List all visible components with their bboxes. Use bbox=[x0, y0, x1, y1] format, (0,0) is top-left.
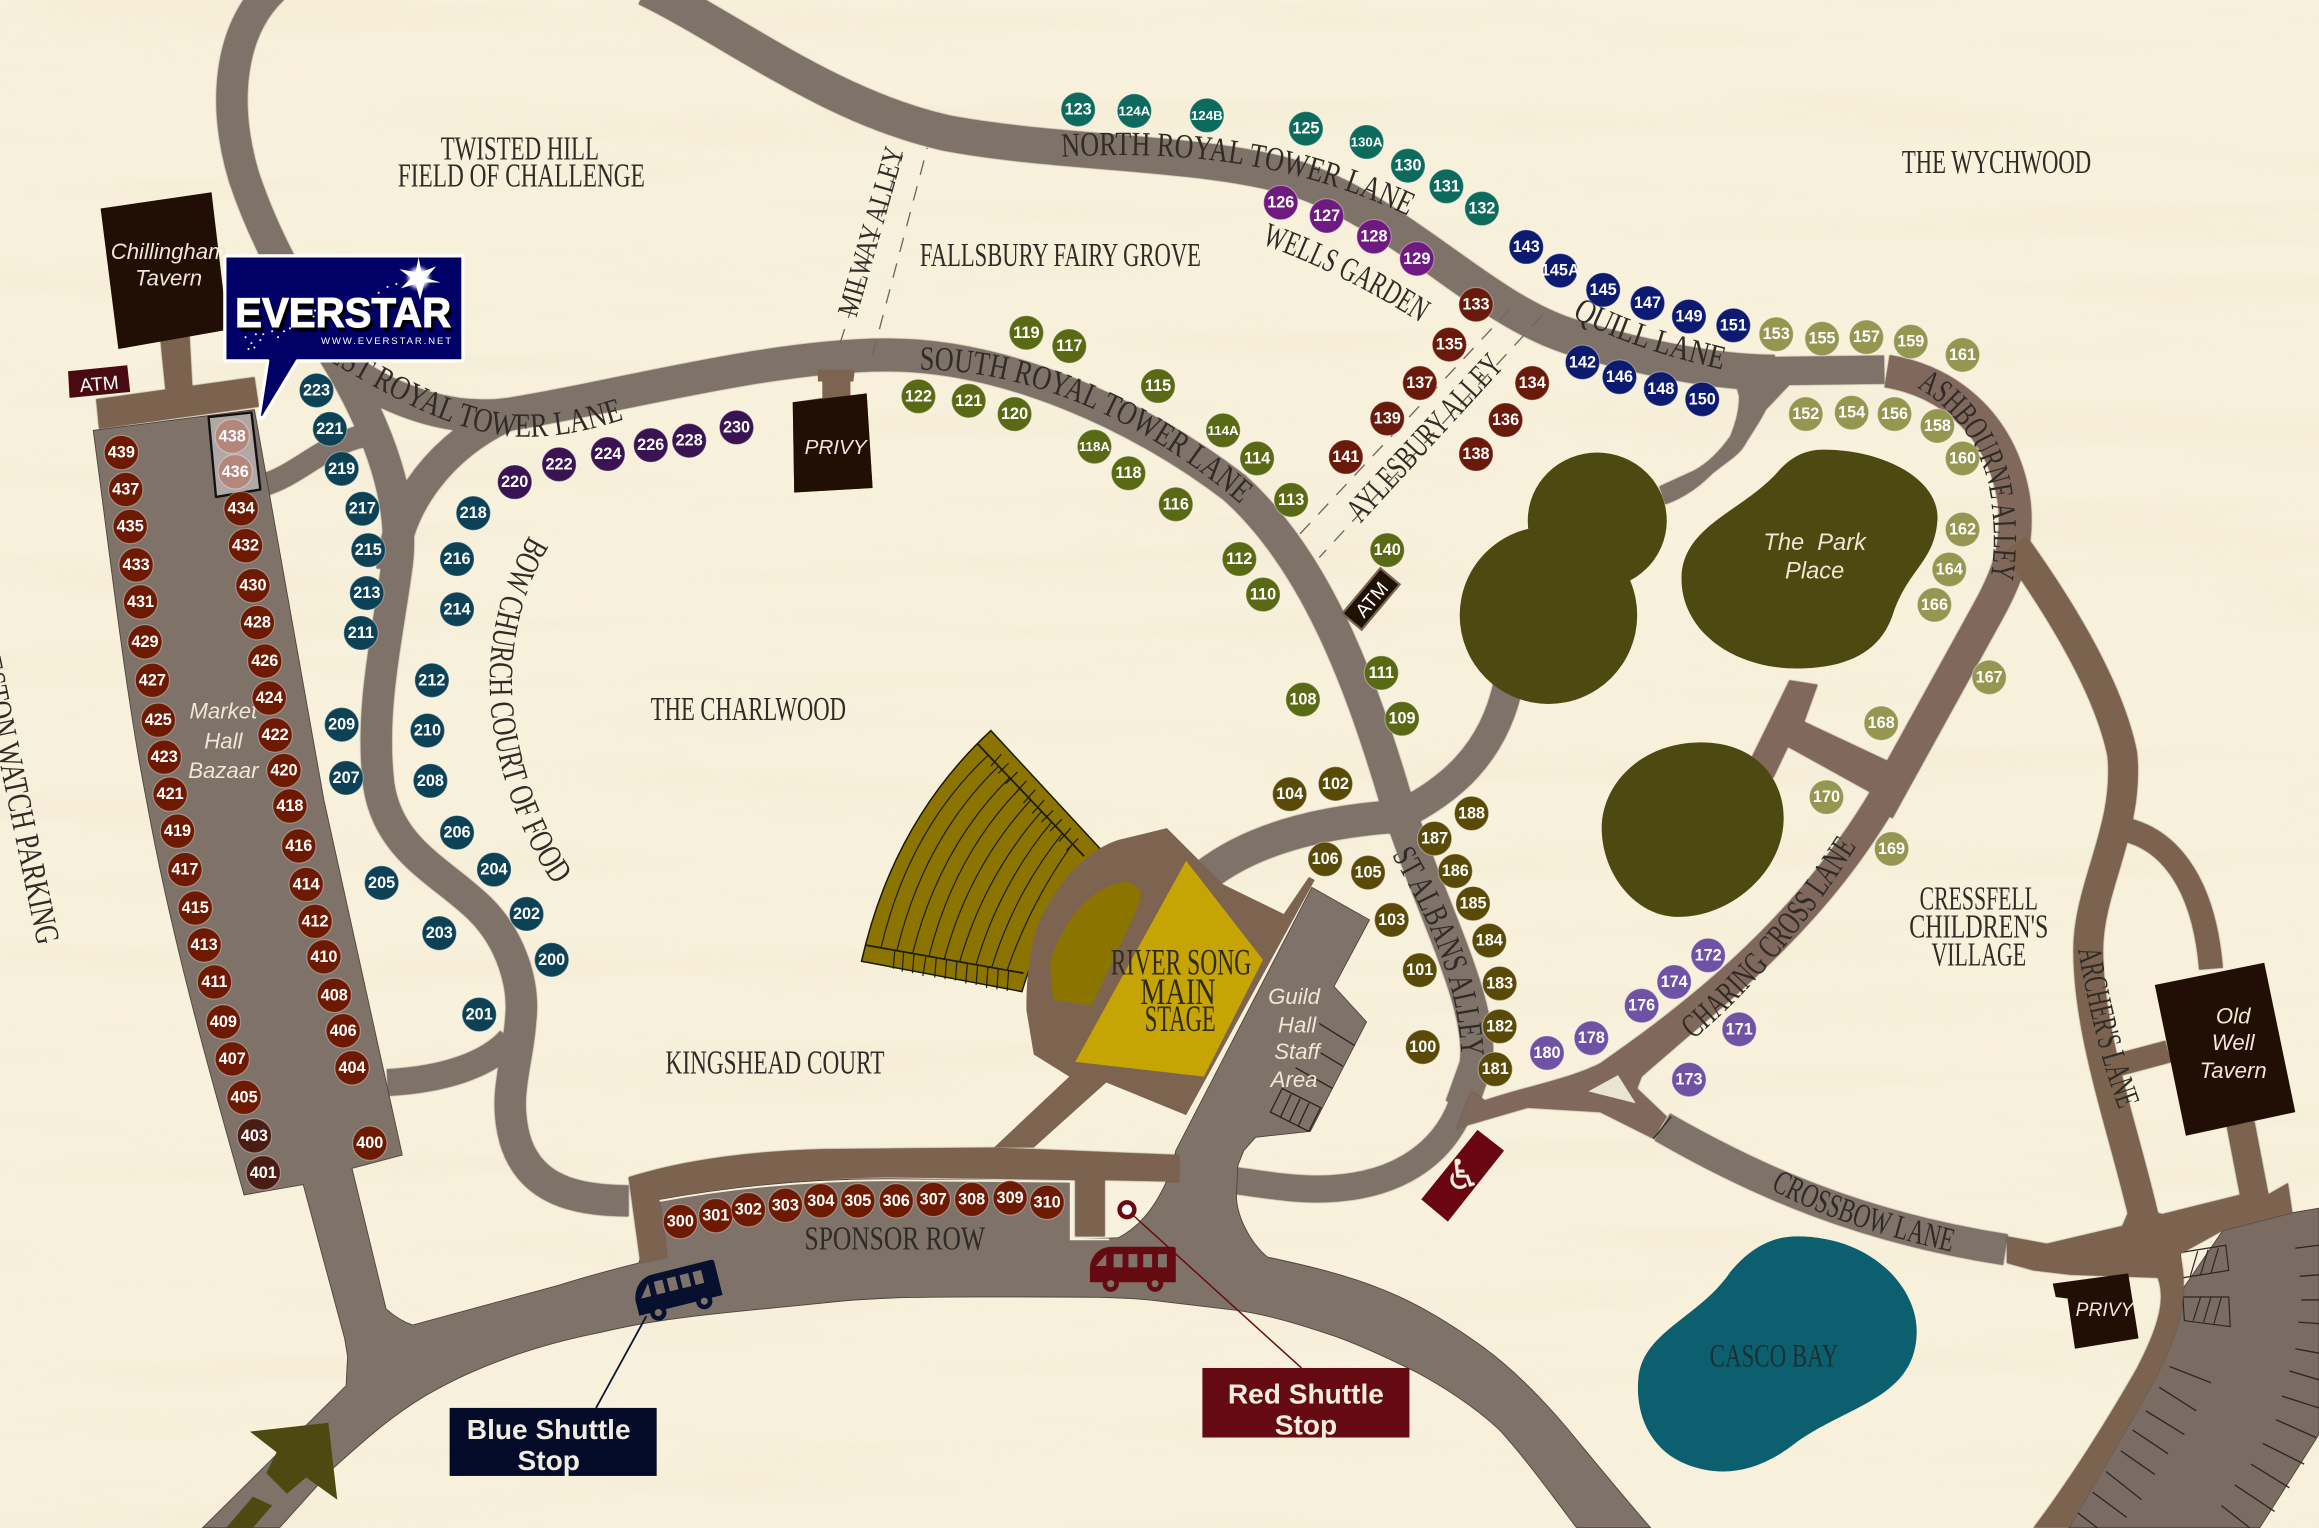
booths: sponsor row 300s: 306 bbox=[883, 1192, 910, 1210]
booths: west royal tower lane purple: 222 bbox=[546, 455, 573, 473]
booths: charing cross lane lavender: 171 bbox=[1726, 1020, 1753, 1038]
booths: market hall bazaar 400s: 419 bbox=[164, 822, 191, 840]
parking lot bbox=[2069, 1208, 2319, 1528]
booths: sponsor row 300s: 302 bbox=[735, 1201, 762, 1219]
booths: south royal tower lane green: 118A bbox=[1079, 439, 1110, 454]
icon: red bus bbox=[1090, 1247, 1176, 1292]
privy north: PRIVY bbox=[805, 436, 869, 459]
callout: red shuttle stop: Red Shuttle bbox=[1228, 1378, 1384, 1409]
booths: ashbourne alley tan: 155 bbox=[1808, 330, 1836, 348]
star dust bbox=[245, 283, 397, 350]
booths: charing cross lane lavender: 176 bbox=[1628, 997, 1655, 1015]
callout: blue shuttle stop: Blue Shuttle bbox=[467, 1414, 631, 1445]
main stage ground bbox=[994, 828, 1315, 1148]
path: chillingham tavern forecourt bbox=[96, 333, 259, 429]
booths: market hall bazaar 400s: 417 bbox=[171, 861, 198, 879]
guild hall staff area parking marks and label bbox=[1268, 984, 1355, 1131]
road: west and south royal tower lane bbox=[343, 355, 1477, 1106]
area labels: THE CHARLWOOD bbox=[651, 691, 846, 728]
booths: aylesbury alley dark red: 139 bbox=[1374, 410, 1401, 428]
market hall bazaar label bbox=[188, 699, 260, 783]
old well tavern: Old bbox=[2216, 1003, 2251, 1028]
booths: bow church court 200s: 209 bbox=[328, 716, 355, 734]
booths: market hall bazaar 400s: 437 bbox=[112, 481, 139, 499]
booths: st albans alley: 100 bbox=[1409, 1038, 1436, 1056]
street labels: CHARING CROSS LANE bbox=[1682, 836, 1856, 1036]
atm east: ATM bbox=[1352, 578, 1393, 622]
market hall bazaar label: Bazaar bbox=[188, 758, 260, 783]
booths: south royal tower lane green: 120 bbox=[1001, 405, 1028, 423]
callout: red shuttle stop: Stop bbox=[1275, 1410, 1337, 1441]
booths: west royal tower lane purple bbox=[498, 410, 754, 499]
area labels: SPONSOR ROW bbox=[805, 1221, 986, 1258]
booths: charing cross lane lavender: 178 bbox=[1578, 1029, 1605, 1047]
booths: bow church court 200s: 205 bbox=[368, 874, 395, 892]
booths: market hall bazaar 400s: 410 bbox=[310, 948, 337, 966]
booths: st albans alley: 187 bbox=[1421, 830, 1448, 848]
main entrance road, market hall and guild hall area bbox=[93, 410, 1650, 1528]
booths: aylesbury alley dark red: 133 bbox=[1462, 296, 1490, 314]
booths: north royal tower lane teal: 124B bbox=[1191, 108, 1223, 123]
icon: blue bus bbox=[630, 1259, 725, 1325]
booths: aylesbury alley dark red: 135 bbox=[1436, 336, 1463, 354]
booths: charing cross lane lavender bbox=[1530, 938, 1756, 1097]
booths: bow church court 200s bbox=[299, 373, 569, 1032]
booths: market hall bazaar 400s: 429 bbox=[131, 633, 159, 651]
booths: charing cross lane lavender: 174 bbox=[1661, 973, 1688, 991]
area labels: THE WYCHWOOD bbox=[1902, 144, 2091, 181]
street labels: ARCHER'S LANE bbox=[2078, 950, 2140, 1108]
booths: south royal tower lane green: 111 bbox=[1369, 664, 1394, 682]
street labels: CROSSBOW LANE bbox=[1774, 1172, 1954, 1252]
road: bow church court bbox=[343, 370, 629, 1201]
booths: aylesbury alley dark red bbox=[1329, 287, 1549, 474]
booths: quill lane navy: 145 bbox=[1590, 281, 1617, 299]
road: st albans lower curve bbox=[1230, 1097, 1464, 1189]
callout: blue shuttle stop bbox=[450, 1259, 725, 1476]
booths: charing cross lane lavender: 173 bbox=[1675, 1071, 1703, 1089]
casco bay lake bbox=[1638, 1236, 1917, 1472]
atm west bbox=[68, 365, 130, 398]
booths: north royal tower lane teal: 131 bbox=[1433, 177, 1460, 195]
booths: south royal tower lane green: 112 bbox=[1226, 550, 1252, 568]
booths: quill lane navy: 148 bbox=[1647, 380, 1674, 398]
street labels bbox=[0, 132, 2140, 1252]
booths: bow church court 200s: 206 bbox=[443, 824, 471, 842]
booths: charing cross lane lavender: 180 bbox=[1533, 1044, 1561, 1062]
booths: south royal tower lane green: 121 bbox=[955, 392, 982, 410]
area labels: CHILDREN'S bbox=[1909, 909, 2048, 946]
booths: west royal tower lane purple: 220 bbox=[501, 473, 528, 491]
booths: bow church court 200s: 213 bbox=[353, 584, 380, 602]
booths: st albans alley: 185 bbox=[1459, 895, 1487, 913]
booths: north royal tower lane teal bbox=[1061, 92, 1499, 226]
booths: sponsor row 300s: 304 bbox=[807, 1192, 834, 1210]
road: west perimeter north bbox=[232, 0, 343, 370]
booths: bow church court 200s: 218 bbox=[460, 504, 487, 522]
booths: south royal tower lane green: 117 bbox=[1056, 337, 1082, 355]
booths: market hall bazaar 400s bbox=[104, 419, 387, 1190]
callout: everstar logo: EVERSTAR bbox=[235, 290, 451, 336]
path: park connector bbox=[1750, 680, 1905, 802]
atm east bbox=[1342, 568, 1400, 630]
callout: everstar logo: WWW.EVERSTAR.NET bbox=[321, 336, 451, 347]
old well tavern: Tavern bbox=[2200, 1058, 2267, 1083]
booths: market hall bazaar 400s: 436 bbox=[222, 463, 249, 481]
booths: bow church court 200s: 200 bbox=[538, 951, 565, 969]
booths: st albans alley: 181 bbox=[1482, 1060, 1509, 1078]
highlight: booths 438 and 436 bbox=[209, 413, 260, 497]
booths: market hall bazaar 400s: 420 bbox=[270, 762, 298, 780]
booths: market hall bazaar 400s: 408 bbox=[321, 986, 348, 1004]
casco bay lake: CASCO BAY bbox=[1710, 1339, 1838, 1375]
privy north bbox=[793, 370, 873, 492]
booths: south royal tower lane green: 109 bbox=[1388, 710, 1416, 728]
booths: south royal tower lane green: 122 bbox=[905, 387, 932, 405]
area labels: VILLAGE bbox=[1931, 937, 2026, 974]
street labels: ASHBOURNE ALLEY bbox=[1917, 372, 2016, 581]
privy south bbox=[2053, 1273, 2139, 1349]
booths: ashbourne alley tan: 166 bbox=[1921, 596, 1948, 614]
callout: everstar logo bbox=[225, 256, 463, 419]
booths: quill lane navy: 146 bbox=[1606, 368, 1633, 386]
street labels: BOW CHURCH COURT OF FOOD bbox=[490, 536, 570, 881]
the park place bbox=[1682, 450, 1938, 668]
guild hall staff area parking marks and label: Hall bbox=[1278, 1012, 1317, 1037]
booths: south royal tower lane green: 140 bbox=[1374, 541, 1401, 559]
booths: sponsor row 300s: 305 bbox=[844, 1192, 871, 1210]
booths: bow church court 200s: 202 bbox=[513, 905, 540, 923]
booths: sponsor row 300s bbox=[663, 1181, 1064, 1239]
booths: ashbourne alley tan: 168 bbox=[1868, 714, 1895, 732]
booths: north royal tower lane teal: 124A bbox=[1118, 103, 1151, 118]
market hall bazaar label: Market bbox=[189, 699, 258, 724]
callout: everstar logo: EVERSTAR bbox=[238, 294, 454, 340]
booths: quill lane navy: 149 bbox=[1675, 307, 1703, 325]
booths: ashbourne alley tan: 170 bbox=[1813, 788, 1840, 806]
booths: quill lane navy: 142 bbox=[1569, 353, 1596, 371]
road: north royal tower lane and quill lane bbox=[646, 0, 1775, 373]
booths: wells garden purple: 129 bbox=[1403, 250, 1430, 268]
booths: st albans alley: 103 bbox=[1378, 911, 1405, 929]
booths: ashbourne alley tan bbox=[1759, 317, 2006, 866]
booths: market hall bazaar 400s: 426 bbox=[251, 652, 278, 670]
area labels: TWISTED HILL bbox=[441, 131, 599, 168]
booths: market hall bazaar 400s: 422 bbox=[262, 726, 289, 744]
the park place: The Park bbox=[1763, 530, 1867, 556]
area labels: CRESSFELL bbox=[1920, 881, 2038, 918]
title: river song main stage: MAIN bbox=[1140, 971, 1216, 1012]
booths: quill lane navy bbox=[1509, 230, 1750, 416]
street labels: MILWAY ALLEY bbox=[838, 146, 904, 318]
street labels: WEST ROYAL TOWER LANE bbox=[332, 362, 622, 437]
marker: red stop bbox=[1120, 1202, 1134, 1217]
sponsor row cream edge bbox=[660, 1180, 1109, 1239]
booths: aylesbury alley dark red: 136 bbox=[1492, 411, 1519, 429]
booths: sponsor row 300s: 307 bbox=[920, 1190, 947, 1208]
booths: st albans alley: 183 bbox=[1486, 974, 1513, 992]
chillingham tavern bbox=[101, 192, 228, 349]
booths: aylesbury alley dark red: 134 bbox=[1519, 374, 1546, 392]
booths: market hall bazaar 400s: 432 bbox=[232, 537, 259, 555]
booths: sponsor row 300s: 300 bbox=[667, 1213, 694, 1231]
booths: sponsor row 300s: 308 bbox=[958, 1190, 985, 1208]
booths: wells garden purple: 128 bbox=[1360, 228, 1388, 246]
booths: north royal tower lane teal: 132 bbox=[1468, 200, 1495, 218]
booths: market hall bazaar 400s: 435 bbox=[117, 517, 144, 535]
stage platform bbox=[1075, 861, 1263, 1077]
booths: market hall bazaar 400s: 416 bbox=[285, 837, 312, 855]
chillingham tavern: Chillingham bbox=[111, 239, 227, 264]
booths: bow church court 200s: 212 bbox=[418, 671, 445, 689]
booths: south royal tower lane green: 110 bbox=[1250, 586, 1276, 604]
booths: ashbourne alley tan: 156 bbox=[1881, 405, 1908, 423]
guild hall staff area parking marks and label: Staff bbox=[1274, 1039, 1323, 1064]
booths: sponsor row 300s: 310 bbox=[1034, 1193, 1061, 1211]
booths: north royal tower lane teal: 123 bbox=[1065, 100, 1092, 118]
booths: st albans alley: 104 bbox=[1276, 785, 1303, 803]
callout: red shuttle stop bbox=[1090, 1202, 1409, 1441]
booths: st albans alley: 186 bbox=[1442, 862, 1469, 880]
booths: market hall bazaar 400s: 427 bbox=[139, 671, 166, 689]
booths: sponsor row 300s: 303 bbox=[772, 1196, 799, 1214]
triangle island bbox=[1588, 1075, 1636, 1103]
booths: quill lane navy: 143 bbox=[1513, 238, 1540, 256]
street labels: QUILL LANE bbox=[1576, 300, 1726, 370]
street labels: WELLS GARDEN bbox=[1267, 223, 1432, 322]
accessible parking bbox=[1421, 1130, 1504, 1222]
booths: st albans alley: 106 bbox=[1312, 850, 1339, 868]
booths: ashbourne alley tan: 159 bbox=[1897, 333, 1924, 351]
booths: bow church court 200s: 204 bbox=[480, 861, 508, 879]
booths: aylesbury alley dark red: 141 bbox=[1332, 448, 1359, 466]
chillingham tavern: Tavern bbox=[135, 265, 202, 290]
booths: wells garden purple: 126 bbox=[1267, 194, 1294, 212]
street labels: NORTH ROYAL TOWER LANE bbox=[1061, 132, 1416, 216]
booths: market hall bazaar 400s: 439 bbox=[108, 444, 135, 462]
booths: market hall bazaar 400s: 403 bbox=[241, 1127, 268, 1145]
booths: bow church court 200s: 210 bbox=[414, 722, 441, 740]
booths: bow church court 200s: 214 bbox=[443, 600, 471, 618]
booths: charing cross lane lavender: 172 bbox=[1695, 946, 1722, 964]
booths: market hall bazaar 400s: 421 bbox=[157, 785, 184, 803]
booths: ashbourne alley tan: 157 bbox=[1853, 328, 1880, 346]
booths: ashbourne alley tan: 153 bbox=[1763, 325, 1790, 343]
amphitheatre seating bbox=[862, 731, 1100, 992]
booths: south royal tower lane green: 115 bbox=[1145, 377, 1171, 395]
booths: bow church court 200s: 216 bbox=[443, 550, 471, 568]
booths: market hall bazaar 400s: 411 bbox=[201, 973, 228, 991]
booths: st albans alley bbox=[1272, 767, 1517, 1086]
booths: quill lane navy: 150 bbox=[1689, 390, 1716, 408]
booths: ashbourne alley tan: 164 bbox=[1936, 560, 1963, 578]
booths: st albans alley: 105 bbox=[1354, 864, 1382, 882]
booths: market hall bazaar 400s: 424 bbox=[256, 689, 283, 707]
booths: market hall bazaar 400s: 405 bbox=[230, 1088, 258, 1106]
booths: bow church court 200s: 217 bbox=[349, 500, 376, 518]
old well tavern: Well bbox=[2212, 1030, 2256, 1055]
booths: aylesbury alley dark red: 137 bbox=[1406, 374, 1433, 392]
booths: south royal tower lane green bbox=[901, 316, 1419, 736]
icon: star bbox=[399, 257, 441, 300]
booths: market hall bazaar 400s: 431 bbox=[127, 593, 154, 611]
booths: aylesbury alley dark red: 138 bbox=[1462, 445, 1490, 463]
area labels: FALLSBURY FAIRY GROVE bbox=[920, 237, 1201, 274]
booths: wells garden purple bbox=[1264, 185, 1434, 276]
old well tavern bbox=[2155, 963, 2295, 1136]
booths: west royal tower lane purple: 228 bbox=[676, 432, 703, 450]
crossbow lane divider bbox=[1653, 1117, 1671, 1139]
trees bbox=[1460, 453, 1784, 917]
booths: market hall bazaar 400s: 430 bbox=[239, 577, 266, 595]
booths: west royal tower lane purple: 226 bbox=[637, 436, 664, 454]
atm west: ATM bbox=[79, 373, 120, 397]
booths: bow church court 200s: 203 bbox=[426, 924, 453, 942]
booths: market hall bazaar 400s: 407 bbox=[219, 1050, 246, 1068]
booths: market hall bazaar 400s: 404 bbox=[338, 1059, 366, 1077]
booths: north royal tower lane teal: 125 bbox=[1292, 120, 1319, 138]
booths: market hall bazaar 400s: 406 bbox=[330, 1022, 357, 1040]
street labels: SOUTH ROYAL TOWER LANE bbox=[921, 347, 1253, 503]
booths: south royal tower lane green: 118 bbox=[1115, 464, 1142, 482]
path: archer's lane bbox=[2014, 544, 2144, 1220]
booths: west royal tower lane purple: 224 bbox=[594, 445, 621, 463]
privy south: PRIVY bbox=[2076, 1300, 2135, 1321]
booths: st albans alley: 184 bbox=[1476, 932, 1503, 950]
booths: market hall bazaar 400s: 425 bbox=[145, 711, 172, 729]
booths: south royal tower lane green: 113 bbox=[1278, 491, 1304, 509]
booths: market hall bazaar 400s: 400 bbox=[356, 1134, 383, 1152]
booths: market hall bazaar 400s: 438 bbox=[219, 427, 246, 445]
booths: ashbourne alley tan: 161 bbox=[1949, 346, 1976, 364]
booths: ashbourne alley tan: 169 bbox=[1878, 840, 1905, 858]
booths: north royal tower lane teal: 130 bbox=[1394, 157, 1422, 175]
booths: bow church court 200s: 219 bbox=[328, 460, 355, 478]
street labels: AYLESBURY ALLEY bbox=[1348, 352, 1502, 524]
booths: sponsor row 300s: 301 bbox=[702, 1207, 729, 1225]
booths: quill lane navy: 151 bbox=[1720, 316, 1747, 334]
road network: grey lanes bbox=[232, 0, 2005, 1250]
booths: sponsor row 300s: 309 bbox=[997, 1189, 1024, 1207]
area labels bbox=[398, 131, 2091, 1258]
road: quill lane branch bbox=[1659, 380, 1792, 504]
booths: south royal tower lane green: 119 bbox=[1013, 324, 1040, 342]
booths: ashbourne alley tan: 158 bbox=[1924, 417, 1951, 435]
booths: south royal tower lane green: 114 bbox=[1244, 449, 1270, 467]
path: ashbourne alley bbox=[1878, 371, 2015, 810]
booths: market hall bazaar 400s: 415 bbox=[182, 899, 209, 917]
booths: south royal tower lane green: 116 bbox=[1163, 495, 1189, 513]
alley dashed lines bbox=[840, 143, 1543, 558]
path: south junction bbox=[2007, 1183, 2292, 1528]
booths: bow church court 200s: 215 bbox=[355, 541, 382, 559]
area labels: KINGSHEAD COURT bbox=[666, 1045, 885, 1082]
booths: market hall bazaar 400s: 428 bbox=[244, 614, 271, 632]
title: river song main stage bbox=[1111, 942, 1251, 1039]
booths: west royal tower lane purple: 230 bbox=[723, 418, 750, 436]
booths: bow church court 200s: 211 bbox=[348, 624, 374, 642]
booths: st albans alley: 188 bbox=[1458, 804, 1485, 822]
booths: south royal tower lane green: 108 bbox=[1289, 691, 1317, 709]
booths: market hall bazaar 400s: 433 bbox=[123, 556, 150, 574]
booths: ashbourne alley tan: 160 bbox=[1949, 449, 1976, 467]
booths: north royal tower lane teal: 130A bbox=[1351, 134, 1383, 149]
booths: bow church court 200s: 221 bbox=[316, 420, 343, 438]
title: river song main stage: STAGE bbox=[1145, 998, 1216, 1039]
booths: bow church court 200s: 223 bbox=[303, 381, 330, 399]
booths: ashbourne alley tan: 167 bbox=[1976, 668, 2003, 686]
street labels: ST ALBANS ALLEY bbox=[1393, 847, 1484, 1054]
brown paths bbox=[96, 333, 2292, 1528]
market hall bazaar label: Hall bbox=[204, 728, 244, 753]
booths: market hall bazaar 400s: 414 bbox=[293, 875, 320, 893]
booths: market hall bazaar 400s: 434 bbox=[228, 500, 255, 518]
booths: ashbourne alley tan: 154 bbox=[1838, 404, 1865, 422]
arrow: entrance bbox=[226, 1423, 337, 1528]
path: sponsor row service lane bbox=[629, 1148, 1179, 1263]
guild hall staff area parking marks and label: Area bbox=[1269, 1067, 1318, 1092]
booths: ashbourne alley tan: 162 bbox=[1949, 520, 1976, 538]
booths: bow church court 200s: 208 bbox=[417, 772, 444, 790]
callout: blue shuttle stop: Stop bbox=[518, 1445, 580, 1476]
path: charing cross lane bbox=[1457, 779, 1911, 1139]
booths: bow church court 200s: 207 bbox=[333, 769, 360, 787]
booths: st albans alley: 102 bbox=[1322, 775, 1349, 793]
booths: quill lane navy: 147 bbox=[1634, 294, 1661, 312]
the park place: Place bbox=[1785, 558, 1844, 584]
area labels: FIELD OF CHALLENGE bbox=[398, 157, 645, 194]
booths: market hall bazaar 400s: 412 bbox=[301, 912, 329, 930]
booths: south royal tower lane green: 114A bbox=[1208, 423, 1239, 438]
booths: market hall bazaar 400s: 409 bbox=[210, 1013, 237, 1031]
booths: st albans alley: 182 bbox=[1486, 1017, 1513, 1035]
booths: ashbourne alley tan: 152 bbox=[1792, 405, 1819, 423]
lawn bbox=[1050, 881, 1141, 1006]
booths: market hall bazaar 400s: 418 bbox=[276, 797, 303, 815]
guild hall staff area parking marks and label: Guild bbox=[1268, 984, 1321, 1009]
booths: market hall bazaar 400s: 423 bbox=[151, 748, 178, 766]
title: river song main stage: RIVER SONG bbox=[1111, 942, 1251, 983]
booths: quill lane navy: 145A bbox=[1541, 262, 1580, 280]
accessible parking: ♿ bbox=[1444, 1151, 1481, 1199]
booths: st albans alley: 101 bbox=[1406, 961, 1433, 979]
booths: market hall bazaar 400s: 401 bbox=[250, 1164, 277, 1182]
booths: bow church court 200s: 201 bbox=[466, 1006, 493, 1024]
booths: wells garden purple: 127 bbox=[1313, 207, 1340, 225]
booths: market hall bazaar 400s: 413 bbox=[191, 936, 218, 954]
